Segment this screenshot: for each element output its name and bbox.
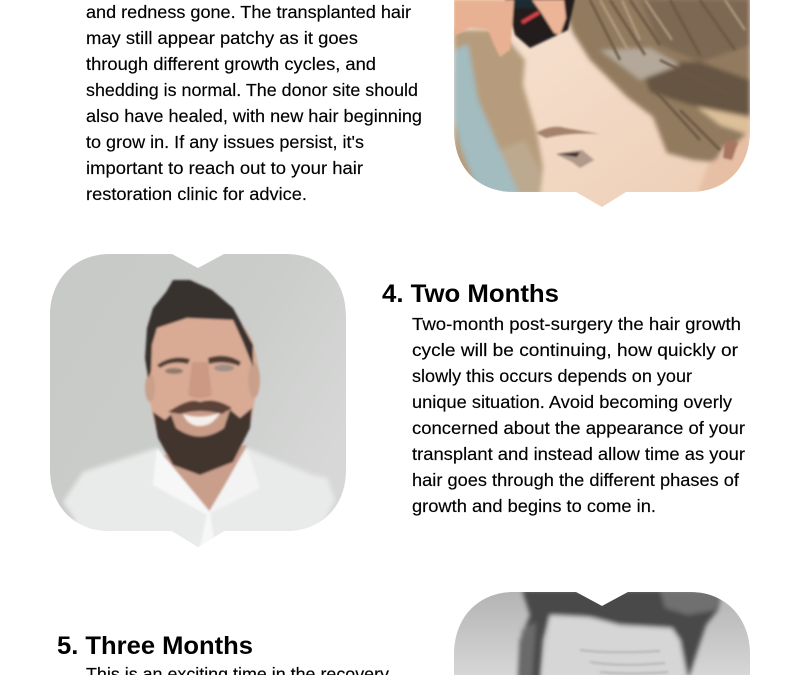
text block: step 4 description: transplant and instead allow time as your [412, 444, 745, 464]
text block: step 4 description [412, 314, 745, 516]
text block: step 3 description: shedding is normal. The donor site should [86, 80, 418, 100]
text block: step 3 description: through different growth cycles, and [86, 54, 376, 74]
text block: step 4 description: growth and begins to come in. [412, 496, 656, 516]
text block: step 4 description: slowly this occurs depends on your [412, 366, 692, 386]
text block: step 3 description: important to reach out to your hair [86, 158, 363, 178]
heading: Two Months: 4. Two Months [382, 280, 559, 308]
text block: step 4 description: unique situation. Avoid becoming overly [412, 392, 732, 412]
text block: step 4 description: hair goes through the different phases of [412, 470, 739, 490]
text block: step 4 description: Two-month post-surgery the hair growth [412, 314, 741, 334]
text block: step 3 description: may still appear patchy as it goes [86, 28, 358, 48]
text block: step 3 description [86, 2, 422, 204]
text block: step 3 description: to grow in. If any issues persist, it's [86, 132, 364, 152]
text block: step 4 description: cycle will be continuing, how quickly or [412, 340, 738, 360]
photo: man with wrinkled forehead [454, 590, 750, 675]
text block: step 4 description: concerned about the appearance of your [412, 418, 745, 438]
heading: Three Months: 5. Three Months [57, 632, 253, 660]
photo: woman's hairline [454, 0, 750, 210]
text block: step 3 description: also have healed, with new hair beginning [86, 106, 422, 126]
text block: step 3 description: restoration clinic for advice. [86, 184, 307, 204]
photo: smiling bearded man [50, 254, 346, 550]
text block: step 3 description: and redness gone. The transplanted hair [86, 2, 411, 22]
